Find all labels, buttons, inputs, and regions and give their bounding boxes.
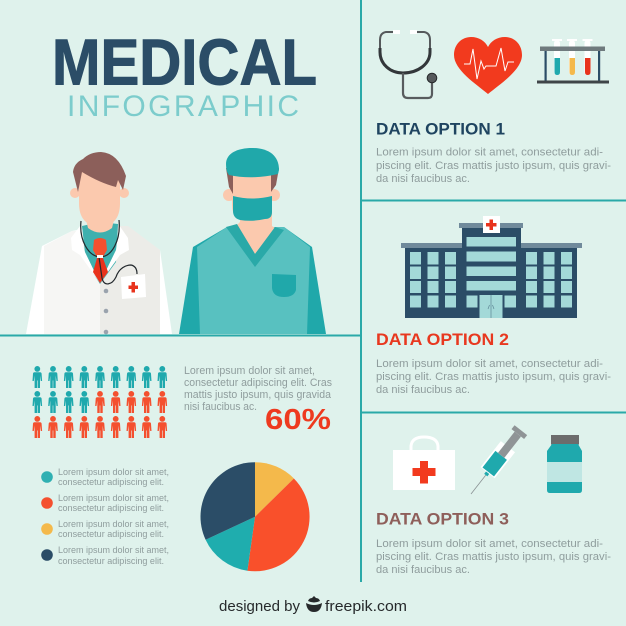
pie chart legend: Lorem ipsum dolor sit amet, (58, 519, 169, 529)
icon: hospital building (401, 216, 582, 318)
surgeon figure (179, 148, 326, 334)
icon: syringe (464, 425, 528, 500)
pie chart legend: consectetur adipiscing elit. (58, 556, 164, 566)
icon: first aid kit (393, 437, 455, 490)
text block: option 2: Lorem ipsum dolor sit amet, consectetur adi- (376, 358, 603, 370)
pie chart legend: consectetur adipiscing elit. (58, 529, 164, 539)
doctor figure (26, 152, 172, 334)
heading: data option 3: DATA OPTION 3 (376, 510, 509, 528)
icon: freepik mascot (306, 596, 322, 612)
footer credit: freepik.com (325, 599, 407, 615)
scrubs pocket (272, 274, 296, 297)
hospital sign (483, 216, 500, 233)
pie chart legend: consectetur adipiscing elit. (58, 503, 164, 513)
text block: option 1: da nisi faucibus ac. (376, 173, 470, 185)
footer credit: designed by (219, 599, 301, 615)
statistic text block: nisi faucibus ac. (184, 401, 257, 413)
statistic text block: mattis justo ipsum, quis gravida (184, 389, 332, 401)
title (52, 26, 317, 123)
text block: option 3: Lorem ipsum dolor sit amet, consectetur adi- (376, 538, 603, 550)
statistic text block: consectetur adipiscing elit. Cras (184, 377, 332, 389)
heading: data option 2: DATA OPTION 2 (376, 330, 509, 349)
text block: option 3: piscing elit. Cras mattis justo ipsum, quis gravi- (376, 551, 611, 563)
statistic text block: Lorem ipsum dolor sit amet, (184, 365, 315, 377)
surgical cap (226, 148, 279, 177)
statistic text block (184, 365, 332, 413)
pie chart legend: Lorem ipsum dolor sit amet, (58, 545, 169, 555)
text block: option 3: da nisi faucibus ac. (376, 564, 470, 576)
icon: test tubes rack (537, 39, 609, 84)
pie chart legend: Lorem ipsum dolor sit amet, (58, 493, 169, 503)
text block: option 1: Lorem ipsum dolor sit amet, consectetur adi- (376, 147, 603, 159)
icon: stethoscope (380, 30, 437, 98)
heading: data option 1: DATA OPTION 1 (376, 120, 505, 138)
people pictogram: 60 percent (32, 366, 167, 438)
icon: heart with pulse (454, 37, 522, 94)
pie chart legend (41, 467, 169, 566)
pie chart legend: Lorem ipsum dolor sit amet, (58, 467, 169, 477)
heading: medical: MEDICAL (52, 26, 317, 98)
statistic: 60%: 60% (265, 404, 331, 436)
icon: medicine bottle (547, 435, 582, 493)
subheading: infographic: INFOGRAPHIC (67, 90, 299, 123)
text block: option 3 (376, 538, 611, 576)
surgical mask (233, 196, 272, 221)
pie chart legend: consectetur adipiscing elit. (58, 477, 164, 487)
text block: option 1: piscing elit. Cras mattis justo ipsum, quis gravi- (376, 160, 611, 172)
text block: option 1 (376, 147, 611, 185)
text block: option 2: da nisi faucibus ac. (376, 384, 470, 396)
footer credit (219, 596, 407, 615)
icon: pocket badge (121, 274, 146, 299)
pie chart (201, 462, 310, 571)
text block: option 2: piscing elit. Cras mattis justo ipsum, quis gravi- (376, 371, 611, 383)
text block: option 2 (376, 358, 611, 396)
